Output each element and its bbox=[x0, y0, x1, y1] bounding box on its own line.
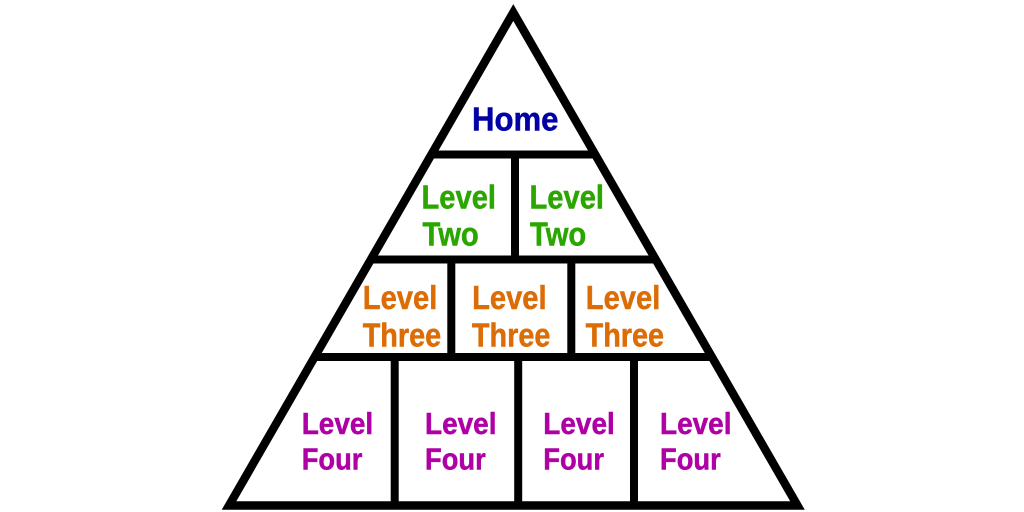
tier: level four: Four bbox=[302, 443, 363, 477]
tier: level three: Level bbox=[363, 279, 437, 316]
tier: level two: Two bbox=[530, 216, 586, 252]
tier: level two bbox=[422, 178, 604, 252]
tier: level two: Two bbox=[422, 216, 479, 252]
tier: level four bbox=[302, 407, 732, 477]
tier: home: Home bbox=[472, 100, 558, 138]
tier: level three: Three bbox=[363, 316, 441, 353]
tier: level three: Three bbox=[472, 316, 550, 353]
tier: level two: Level bbox=[422, 178, 496, 216]
tier: level two: Level bbox=[530, 178, 604, 216]
tier: level four: Level bbox=[660, 407, 732, 441]
tier: level three: Three bbox=[586, 316, 664, 353]
tier: level four: Four bbox=[425, 443, 486, 477]
tier: level three: Level bbox=[586, 279, 660, 316]
tier: level four: Level bbox=[425, 407, 496, 441]
pyramid outline bbox=[229, 12, 798, 506]
tier: level four: Four bbox=[660, 443, 721, 477]
tier: level four: Level bbox=[302, 407, 373, 441]
tier: level four: Level bbox=[543, 407, 615, 441]
tier: level three: Level bbox=[472, 279, 547, 316]
tier: level three bbox=[363, 279, 664, 353]
tier: level four: Four bbox=[543, 443, 604, 477]
